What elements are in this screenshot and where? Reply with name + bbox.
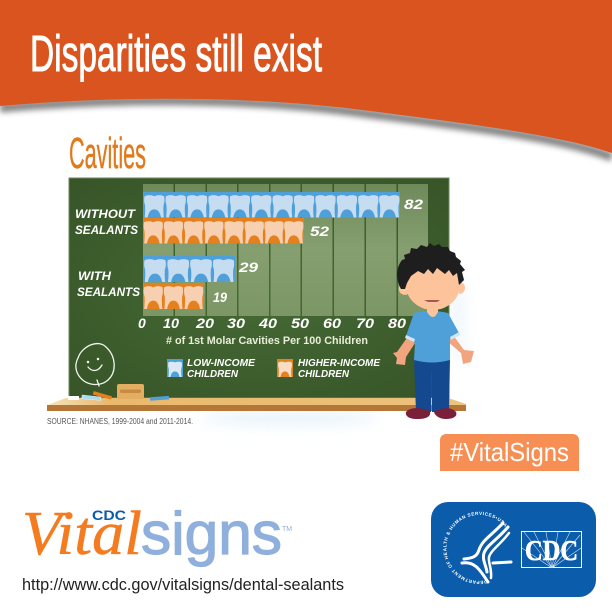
- neck: [427, 306, 438, 317]
- x-axis numbers: 10: [163, 315, 179, 331]
- legend: higher-income: CHILDREN: [298, 369, 350, 380]
- row labels: WITH: [78, 269, 111, 283]
- shirt: [406, 311, 459, 362]
- row labels: SEALANTS: [75, 223, 138, 237]
- x-axis numbers: 80: [388, 315, 406, 331]
- bar: without sealants, higher-income, 52: [143, 218, 304, 244]
- legend: higher-income: HIGHER-INCOME: [298, 358, 380, 369]
- value labels: 19: [213, 289, 227, 305]
- sleeve cuffs: [405, 332, 460, 342]
- legend: higher-income: [277, 358, 380, 380]
- hashtag badge: #VitalSigns: [450, 437, 569, 467]
- x-axis numbers: 70: [356, 315, 374, 331]
- legs: [414, 358, 450, 412]
- badge background: [431, 502, 596, 597]
- axis title: # of 1st Molar Cavities Per 100 Children: [166, 335, 368, 347]
- row labels: SEALANTS: [77, 285, 140, 299]
- x-axis numbers: 40: [258, 315, 277, 331]
- source note: SOURCE: NHANES, 1999-2004 and 2011-2014.: [47, 417, 193, 426]
- glow under the boy: [200, 275, 465, 425]
- text: Cavities: [69, 129, 146, 178]
- character: boy: [393, 243, 474, 419]
- shoes: [406, 408, 456, 419]
- value labels: 29: [238, 259, 258, 275]
- x-axis numbers: 30: [227, 315, 245, 331]
- x-axis numbers: [138, 315, 406, 331]
- x-axis numbers: 0: [138, 315, 146, 331]
- value labels: 52: [310, 223, 329, 239]
- bar: with sealants, higher-income, 19: [143, 283, 204, 309]
- x-axis numbers: 20: [195, 315, 214, 331]
- face: [406, 260, 460, 310]
- value labels: 82: [404, 196, 423, 212]
- header shadow: [0, 101, 612, 157]
- x-axis numbers: 50: [291, 315, 309, 331]
- chalk and eraser: [68, 384, 169, 401]
- x-axis numbers: 60: [323, 315, 341, 331]
- ears: [399, 282, 465, 295]
- bar: without sealants, low-income, 82: [143, 192, 400, 218]
- panel: chalkboard: [69, 178, 449, 398]
- mouth: [424, 300, 440, 302]
- logo: CDC Vital Signs: Vital: [22, 500, 142, 568]
- legend: low-income: LOW-INCOME: [187, 358, 255, 369]
- logo: HHS and CDC: [431, 502, 596, 597]
- bar: with sealants, low-income, 29: [143, 256, 235, 282]
- eagle: [462, 523, 511, 582]
- row labels: WITHOUT: [75, 207, 137, 221]
- chart: column grid: [143, 184, 428, 316]
- arms: [393, 335, 474, 365]
- logo: CDC Vital Signs: CDC: [92, 508, 126, 523]
- legend: low-income: [167, 358, 255, 380]
- value labels: [213, 196, 423, 305]
- legend: low-income: CHILDREN: [187, 369, 239, 380]
- hair: [397, 243, 465, 289]
- logo: CDC Vital Signs: [22, 500, 292, 568]
- logo: CDC Vital Signs: signs: [141, 500, 282, 567]
- ledge: [47, 398, 466, 411]
- logo: CDC Vital Signs: TM: [282, 526, 292, 533]
- cdc box: CDC: [525, 536, 578, 567]
- seal text: DEPARTMENT OF HEALTH & HUMAN SERVICES•USA: [443, 512, 507, 584]
- url: http://www.cdc.gov/vitalsigns/dental-sealants: [22, 576, 344, 594]
- icon: chalk smiley: [76, 344, 114, 386]
- row labels: [75, 207, 140, 299]
- title: Disparities still exist: [30, 25, 322, 82]
- header banner: [0, 0, 612, 153]
